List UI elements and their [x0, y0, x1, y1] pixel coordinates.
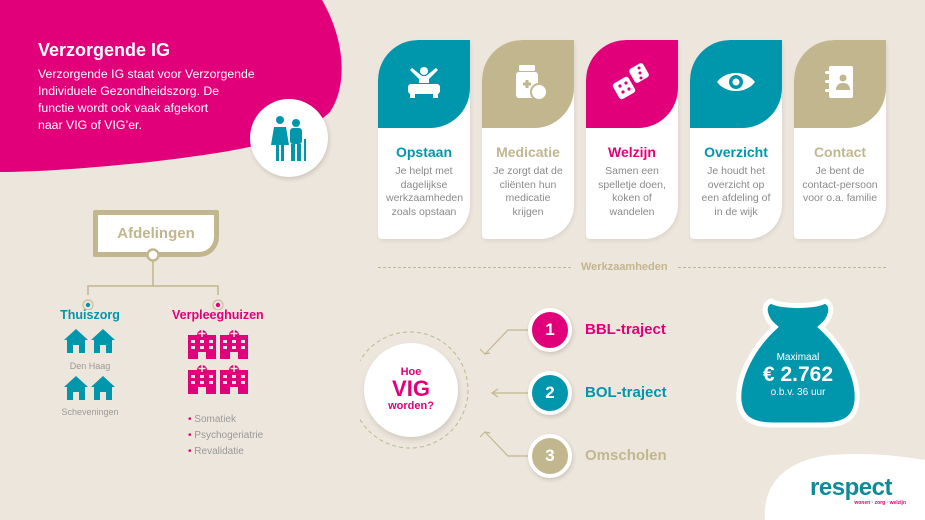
- step 3: 3: [545, 446, 555, 465]
- card: Contact: [794, 40, 886, 239]
- icon: hospitals: [188, 330, 248, 394]
- card: Overzicht: [690, 40, 782, 239]
- verpleeghuizen: • Somatiek: [188, 414, 236, 425]
- card: Medicatie: [482, 40, 574, 239]
- money bag: [736, 298, 860, 428]
- intro text: functie wordt ook vaak afgekort: [38, 101, 208, 115]
- card: Opstaan: Je helpt met dagelijkse werkzaamheden zoals opstaan: [386, 165, 463, 218]
- thuiszorg: Thuiszorg: [60, 308, 120, 322]
- money bag: Maximaal: [777, 352, 819, 363]
- thuiszorg: Den Haag: [70, 361, 110, 371]
- step 3: [528, 434, 572, 478]
- hoe VIG worden circle: worden?: [388, 400, 434, 412]
- card: Welzijn: Samen een spelletje doen, koken of wandelen: [598, 165, 666, 218]
- card: Medicatie: Je zorgt dat de cliënten hun medicatie krijgen: [493, 165, 563, 218]
- logo respect: wonen · zorg · welzijn: [854, 500, 906, 506]
- afdelingen tree: [82, 262, 224, 310]
- card: Welzijn: [586, 40, 678, 239]
- icon: dice: [612, 63, 649, 100]
- card: Opstaan: [378, 40, 470, 239]
- text: BOL-traject: [585, 384, 667, 401]
- text: Omscholen: [585, 447, 667, 464]
- intro text: Verzorgende IG staat voor Verzorgende: [38, 67, 255, 81]
- step 2: 2: [545, 383, 555, 402]
- money bag: € 2.762: [763, 363, 833, 386]
- hoe VIG worden circle: Hoe: [401, 366, 421, 378]
- hoe VIG worden circle: VIG: [392, 376, 430, 401]
- icon: eye: [717, 73, 755, 91]
- card: Medicatie: Medicatie: [496, 144, 560, 160]
- card: Welzijn: Welzijn: [608, 144, 656, 160]
- intro text: naar VIG of VIG’er.: [38, 118, 142, 132]
- icon: caregiver circle: [250, 99, 328, 177]
- verpleeghuizen: Verpleeghuizen: [172, 308, 264, 322]
- verpleeghuizen: • Psychogeriatrie: [188, 430, 263, 441]
- card: Overzicht: Je houdt het overzicht op een afdeling of in de wijk: [702, 165, 770, 218]
- verpleeghuizen: [172, 308, 264, 457]
- intro text: Individuele Gezondheidszorg. De: [38, 84, 219, 98]
- card: Contact: Je bent de contact-persoon voor o.a. familie: [802, 165, 878, 204]
- icon: medicine: [516, 65, 546, 99]
- thuiszorg: [60, 308, 120, 417]
- money bag: o.b.v. 36 uur: [771, 387, 825, 398]
- card: Overzicht: Overzicht: [704, 144, 768, 160]
- hoe VIG worden circle: [364, 343, 458, 437]
- verpleeghuizen: • Revalidatie: [188, 446, 244, 457]
- arrows and dashed ring: [360, 329, 528, 457]
- logo respect: respect: [810, 474, 892, 501]
- step 1: [528, 308, 572, 352]
- werkzaamheden divider: Werkzaamheden: [581, 261, 668, 273]
- icon: bed: [408, 67, 440, 98]
- afdelingen box: [93, 210, 219, 257]
- step 1: 1: [545, 320, 555, 339]
- card: Contact: Contact: [814, 144, 866, 160]
- title: Verzorgende IG: [38, 40, 170, 60]
- thuiszorg: Scheveningen: [61, 407, 119, 417]
- intro text: [38, 67, 255, 132]
- afdelingen box: Afdelingen: [117, 225, 195, 242]
- step 2: [528, 371, 572, 415]
- card: Opstaan: Opstaan: [396, 144, 452, 160]
- icon: address book: [825, 66, 853, 98]
- text: BBL-traject: [585, 321, 666, 338]
- icon: houses: [64, 329, 115, 353]
